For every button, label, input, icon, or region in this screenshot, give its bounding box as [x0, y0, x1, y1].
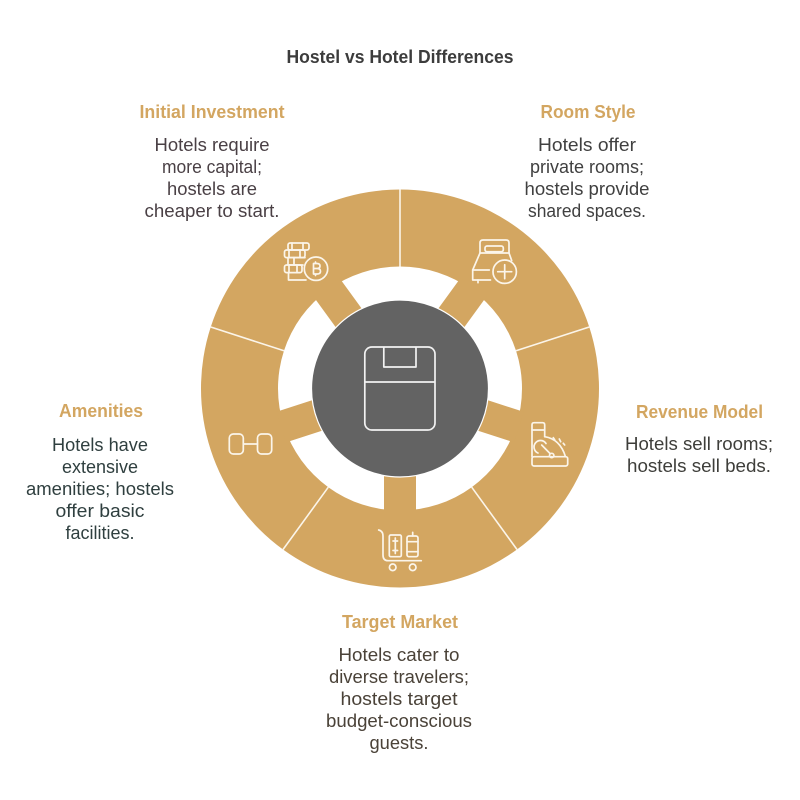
- segment: initial investment: [211, 190, 400, 351]
- text block: room style: Hotels offer: [538, 135, 636, 155]
- segment: amenities: [201, 327, 329, 550]
- text block: room style: private rooms;: [530, 157, 644, 177]
- panel: amenities: [26, 401, 174, 543]
- text block: room style: hostels provide: [524, 179, 650, 199]
- icon: luggage cart: [379, 530, 421, 571]
- text block: target market: hostels target: [340, 689, 458, 709]
- icon: cash register: [532, 423, 568, 466]
- icon: coins and bitcoin: [284, 243, 328, 280]
- title: Hostel vs Hotel Differences: [286, 47, 514, 67]
- text block: initial investment: more capital;: [162, 157, 262, 177]
- text block: revenue model: [625, 434, 773, 476]
- text block: amenities: facilities.: [66, 523, 134, 543]
- segment: target market: [283, 468, 517, 588]
- text block: amenities: extensive: [62, 457, 138, 477]
- text block: initial investment: Hotels require: [154, 135, 270, 155]
- heading: target market: Target Market: [342, 612, 458, 632]
- text block: amenities: [26, 435, 174, 543]
- panel: initial investment: [140, 102, 284, 221]
- icon: dumbbell: [229, 434, 272, 454]
- heading: room style: Room Style: [540, 102, 636, 122]
- icon: bed top view: [365, 347, 435, 430]
- segment: revenue model: [471, 327, 599, 550]
- heading: amenities: Amenities: [59, 401, 143, 421]
- text block: initial investment: [144, 135, 280, 221]
- heading: initial investment: Initial Investment: [140, 102, 284, 122]
- text block: room style: [524, 135, 650, 221]
- panel: room style: [524, 102, 650, 221]
- wheel diagram: [201, 190, 599, 588]
- text block: revenue model: Hotels sell rooms;: [625, 434, 773, 454]
- text block: amenities: amenities; hostels: [26, 479, 174, 499]
- text block: amenities: Hotels have: [52, 435, 148, 455]
- text block: initial investment: cheaper to start.: [144, 201, 280, 221]
- text block: target market: budget-conscious: [326, 711, 472, 731]
- center hub: [312, 300, 488, 477]
- text block: target market: diverse travelers;: [329, 667, 469, 687]
- text block: room style: shared spaces.: [528, 201, 646, 221]
- text block: target market: [326, 645, 472, 753]
- heading: revenue model: Revenue Model: [636, 402, 763, 422]
- text block: initial investment: hostels are: [167, 179, 257, 199]
- panel: target market: [326, 612, 472, 753]
- icon: bed with plus: [473, 240, 516, 283]
- text block: revenue model: hostels sell beds.: [627, 456, 771, 476]
- text block: target market: guests.: [370, 733, 428, 753]
- panel: revenue model: [625, 402, 773, 476]
- text block: target market: Hotels cater to: [338, 645, 460, 665]
- segment: room style: [400, 190, 589, 351]
- text block: amenities: offer basic: [56, 501, 144, 521]
